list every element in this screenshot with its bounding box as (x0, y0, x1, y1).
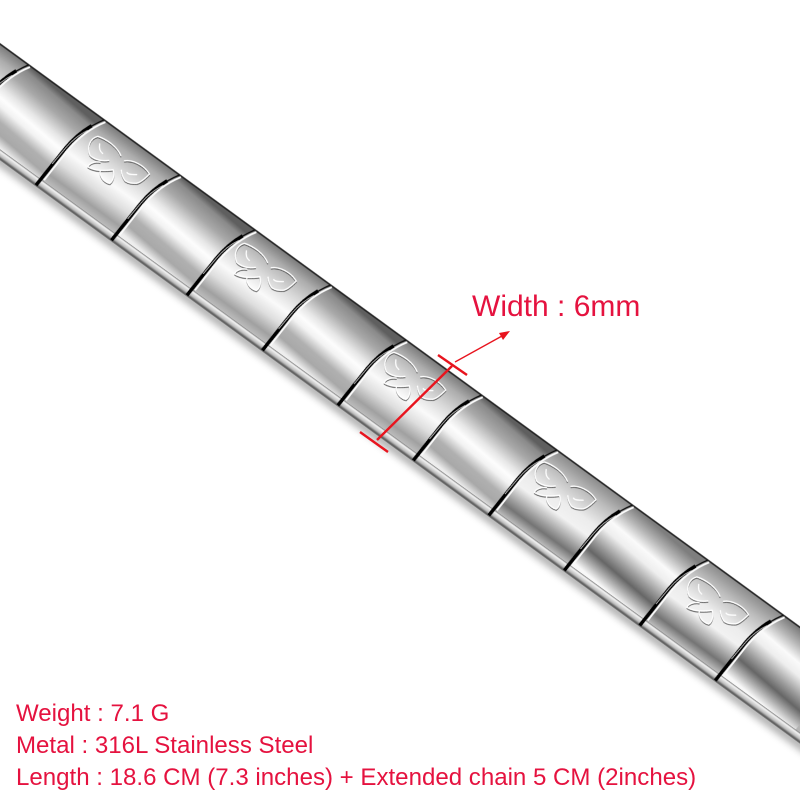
specifications text (16, 700, 696, 791)
link: plain 2 (117, 165, 255, 299)
width measurement marker (360, 331, 510, 452)
link: butterfly 2 (192, 221, 330, 354)
link: butterfly 3 (343, 331, 481, 464)
engraved butterflies (74, 133, 752, 642)
link: butterfly 1 (41, 110, 180, 244)
dimension line (377, 366, 452, 440)
link joints (0, 55, 785, 692)
link: butterfly 5 (645, 551, 783, 684)
link: butterfly 0 (0, 0, 29, 134)
link: plain 1 (0, 55, 104, 189)
spec: metal: Metal : 316L Stainless Steel (16, 732, 313, 759)
top tick (438, 355, 467, 375)
arrow to label (455, 331, 510, 362)
link: plain 6 (720, 606, 800, 739)
bottom tick (360, 432, 388, 452)
spec: length: Length : 18.6 CM (7.3 inches) + Extended chain 5 CM (2inches) (16, 764, 696, 791)
label: width: Width : 6mm (472, 290, 640, 323)
link: plain 5 (569, 496, 708, 629)
link: butterfly 4 (494, 441, 632, 574)
spec: weight: Weight : 7.1 G (16, 700, 169, 727)
link: plain 3 (267, 276, 406, 409)
link: plain 4 (418, 386, 557, 519)
